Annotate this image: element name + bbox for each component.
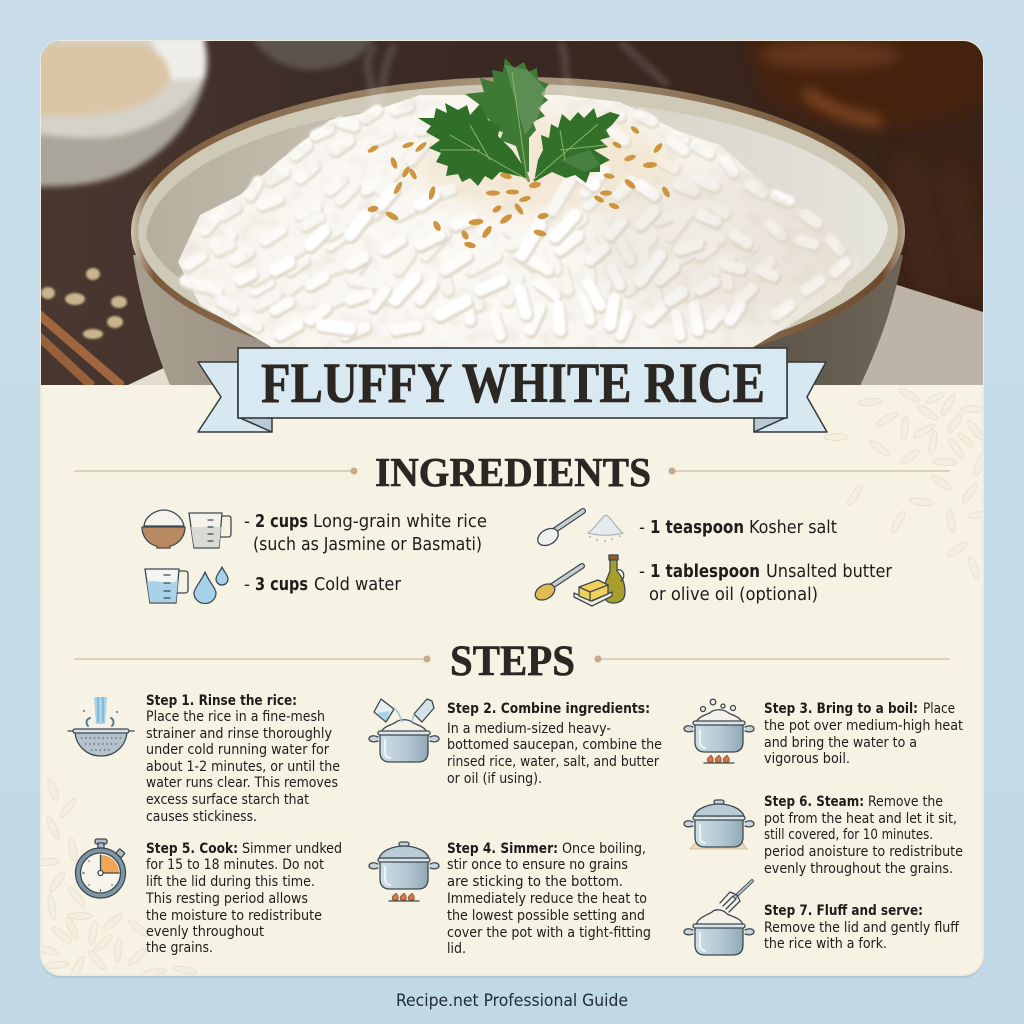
step 5 text: evenly throughout <box>146 924 264 940</box>
ingredient text: 1 teaspoon <box>650 517 744 538</box>
steps heading with dividers <box>74 638 950 685</box>
icon: boiling pot <box>684 699 754 763</box>
icon: spoon with oil <box>532 566 582 603</box>
ingredient text: (such as Jasmine or Basmati) <box>253 534 482 555</box>
step 1 text <box>146 693 340 825</box>
ingredient text: Cold water <box>314 574 401 595</box>
step 6 text <box>764 794 963 877</box>
hero photo: bowl of rice <box>30 30 990 390</box>
step 2 text: bottomed saucepan, combine the <box>447 737 662 753</box>
step 7 text <box>764 903 959 952</box>
step 5 text <box>145 841 342 956</box>
sesame seeds on rice <box>367 125 671 249</box>
ingredient: rice <box>142 510 487 555</box>
ingredient text <box>639 517 837 538</box>
ingredient text: - <box>244 511 250 532</box>
step 3 text: vigorous boil. <box>764 751 850 767</box>
step 6 text: Step 6. Steam: <box>764 794 864 810</box>
blurred bowl top centre <box>252 41 374 72</box>
step 4 text: Step 4. Simmer: <box>447 841 558 857</box>
step 6 text: evenly throughout the grains. <box>764 861 953 877</box>
step 6 text: pot from the heat and let it sit, <box>764 811 957 827</box>
ingredient text: 3 cups <box>255 574 308 595</box>
step 2 text: Step 2. Combine ingredients: <box>447 701 650 717</box>
icon: measuring cup <box>189 513 231 548</box>
step 7 text: the rice with a fork. <box>764 936 887 952</box>
footer: Recipe.net Professional Guide <box>396 991 628 1010</box>
ingredient text: - <box>639 517 645 538</box>
step 4 text: stir once to ensure no grains <box>447 857 628 873</box>
ingredient: butter or oil <box>532 555 892 606</box>
step 4 text <box>447 841 651 957</box>
ribbon band <box>238 348 787 418</box>
step 5 text: the grains. <box>146 940 213 956</box>
step 5 text: This resting period allows <box>145 891 308 907</box>
step 5 text: Simmer undked <box>242 841 342 857</box>
step 5 text: for 15 to 18 minutes. Do not <box>146 857 324 873</box>
step 1 <box>68 693 340 825</box>
title ribbon <box>198 348 827 432</box>
step 2 text: or oil (if using). <box>447 771 542 787</box>
step 3 <box>684 699 963 767</box>
icon: water cup <box>145 569 188 603</box>
ingredient text <box>244 574 401 595</box>
step 5 text: lift the lid during this time. <box>146 874 315 890</box>
icon: water drops <box>194 567 228 604</box>
step 5 <box>76 839 342 956</box>
icon: spoon <box>535 511 583 549</box>
step 3 text: Step 3. Bring to a boil: <box>764 701 918 717</box>
ingredient text: or olive oil (optional) <box>649 584 818 605</box>
step 1 text: Step 1. Rinse the rice: <box>146 693 297 709</box>
step 4 text: lid. <box>447 941 466 957</box>
ingredient text: Unsalted butter <box>766 561 892 582</box>
step 1 text: about 1-2 minutes, or until the <box>146 759 340 775</box>
steps heading with dividers: STEPS <box>450 638 575 685</box>
step 1 text: Place the rice in a fine-mesh <box>146 709 325 725</box>
step 4 text: cover the pot with a tight-fitting <box>447 925 651 941</box>
chopsticks <box>36 312 122 386</box>
step 2 text <box>447 701 662 787</box>
step 4 text: Immediately reduce the heat to <box>447 891 647 907</box>
ingredient text: Kosher salt <box>749 517 837 538</box>
ingredient text: - <box>244 574 250 595</box>
step 1 text: excess surface starch that <box>146 792 309 808</box>
ingredient text: 2 cups <box>255 511 308 532</box>
step 7 text: Remove the lid and gently fluff <box>764 920 959 936</box>
decorative rice grains bottom left <box>35 778 197 979</box>
blurred brown bowl top right <box>745 30 990 130</box>
ribbon tails <box>198 362 827 432</box>
rice mound <box>170 90 870 355</box>
icon: pot of rice with fork <box>684 881 754 955</box>
step 4 text: the lowest possible setting and <box>447 908 645 924</box>
icon: pot with pouring cups <box>369 699 439 762</box>
step 1 text: water runs clear. This removes <box>146 775 338 791</box>
step 3 text <box>764 701 963 767</box>
step 7 text: Step 7. Fluff and serve: <box>764 903 923 919</box>
icon: olive oil bottle <box>604 555 625 603</box>
icon: butter <box>574 580 612 606</box>
ingredients heading with dividers: INGREDIENTS <box>375 449 651 495</box>
ingredient text: - <box>639 561 645 582</box>
steam <box>362 41 670 104</box>
linen napkin <box>128 282 983 385</box>
step 7 <box>684 881 959 955</box>
step 2 text: rinsed rice, water, salt, and butter <box>447 754 660 770</box>
step 6 text: period anoisture to redistribute <box>764 844 963 860</box>
blurred bowl top left <box>30 30 208 187</box>
step 1 text: causes stickiness. <box>146 809 257 825</box>
step 1 text: strainer and rinse thoroughly <box>146 726 333 742</box>
step 3 text: and bring the water to a <box>764 735 917 751</box>
step 4 <box>369 841 651 957</box>
ingredient text: 1 tablespoon <box>650 561 760 582</box>
ingredient: water <box>145 567 401 604</box>
step 6 text: Remove the <box>868 794 943 810</box>
ingredient text: Long-grain white rice <box>313 511 487 532</box>
ingredient text <box>244 511 487 555</box>
step 5 text: Step 5. Cook: <box>146 841 238 857</box>
step 4 text: are sticking to the bottom. <box>447 874 623 890</box>
step 2 <box>369 699 662 787</box>
title text: FLUFFY WHITE RICE <box>261 352 765 415</box>
icon: salt pile <box>588 515 623 541</box>
step 3 text: the pot over medium-high heat <box>764 718 963 734</box>
ingredients heading with dividers <box>74 449 950 495</box>
icon: stopwatch <box>76 839 126 898</box>
bowl <box>131 77 905 390</box>
ingredient text <box>639 561 892 605</box>
step 3 text: Place <box>923 701 955 717</box>
parsley garnish <box>418 58 620 186</box>
icon: colander under running water <box>68 697 134 756</box>
step 5 text: the moisture to redistribute <box>146 908 322 924</box>
decorative rice grains top right <box>824 386 988 580</box>
step 1 text: under cold running water for <box>146 742 330 758</box>
step 2 text: In a medium-sized heavy- <box>447 721 611 737</box>
icon: covered pot on trivet <box>684 800 754 849</box>
step 4 text: Once boiling, <box>562 841 646 857</box>
ingredient: salt <box>535 511 837 549</box>
icon: rice bowl <box>142 510 185 548</box>
icon: covered pot on flame <box>369 842 439 901</box>
step 6 <box>684 794 963 877</box>
sesame seeds on table <box>41 268 127 339</box>
step 6 text: still covered, for 10 minutes. <box>764 827 933 843</box>
